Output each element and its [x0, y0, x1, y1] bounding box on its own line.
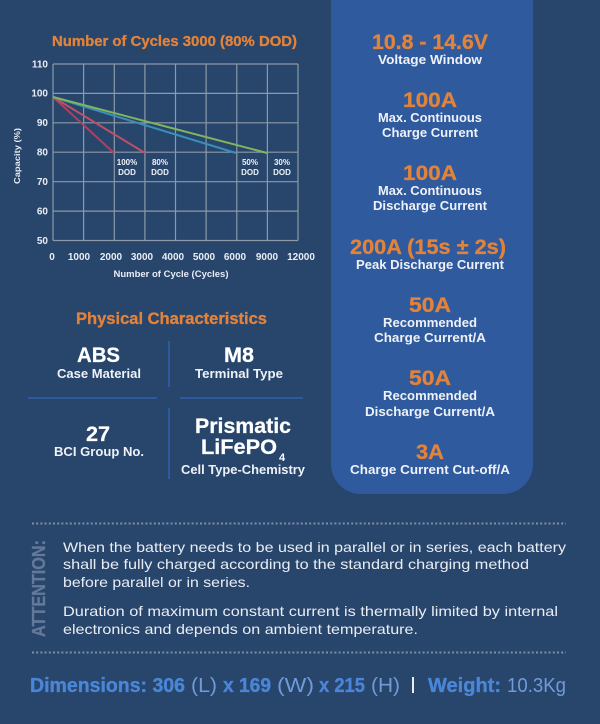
label: 80% DOD: DOD: [151, 168, 169, 177]
label: 100% DOD: [117, 158, 137, 177]
attention note text: before parallel or in series.: [63, 574, 250, 590]
spec: voltage window: 10.8 - 14.6V: [372, 31, 488, 54]
item: cell type chemistry: 4: [279, 452, 286, 464]
item: terminal type: [195, 344, 283, 381]
attention note text: When the battery needs to be used in parallel or in series, each battery: [63, 539, 566, 555]
spec: recommended charge current: Recommended: [383, 316, 477, 330]
item: case material: Case Material: [57, 367, 141, 381]
spec: max continuous discharge current: 100A: [403, 162, 457, 185]
attention note text: [63, 539, 566, 637]
x axis tick labels: 9000: [256, 252, 279, 263]
line chart: capacity vs cycles: [12, 60, 315, 279]
spec: max continuous charge current: Charge Current: [382, 126, 479, 140]
item: case material: ABS: [77, 344, 120, 367]
item: BCI group number: BCI Group No.: [54, 445, 144, 459]
x axis tick labels: 6000: [224, 252, 247, 263]
series: 100% DOD: [53, 97, 114, 153]
spec: max continuous charge current: [378, 89, 482, 140]
spec: max continuous charge current: 100A: [403, 89, 457, 112]
panel: electrical specifications: [331, 0, 533, 494]
item: cell type chemistry: [181, 415, 305, 477]
x axis tick labels: 4000: [162, 252, 185, 263]
y axis tick labels: 100: [31, 88, 48, 100]
y axis tick labels: 110: [32, 60, 48, 70]
y axis tick labels: 80: [37, 148, 48, 158]
label: 50% DOD: [241, 158, 259, 177]
spec: max continuous discharge current: Max. Continuous: [378, 184, 482, 198]
item: BCI group number: [54, 423, 144, 459]
label: 50% DOD: DOD: [241, 168, 259, 177]
panel: physical characteristics grid: [28, 341, 305, 479]
x axis title: Number of Cycle (Cycles): [114, 269, 228, 279]
spec: voltage window: [372, 31, 488, 67]
heading: physical characteristics: Physical Characteristics: [76, 310, 267, 328]
spec: recommended charge current: Charge Current/A: [374, 331, 486, 345]
label: 30% DOD: [273, 158, 291, 177]
y axis tick labels: 70: [37, 177, 48, 188]
x axis tick labels: 0: [49, 252, 55, 263]
series: 50% DOD: [53, 97, 236, 153]
dimensions and weight line: 10.3Kg: [507, 675, 566, 697]
attention note text: electronics and depends on ambient temperature.: [63, 621, 418, 637]
dimensions and weight line: [30, 675, 566, 697]
item: terminal type: Terminal Type: [195, 367, 283, 381]
attention label: ATTENTION:: [29, 540, 49, 637]
label: 80% DOD: [151, 158, 169, 177]
y axis tick labels: 60: [37, 206, 48, 218]
x axis tick labels: 2000: [100, 252, 123, 263]
spec: recommended discharge current: Discharge Current/A: [365, 405, 495, 419]
label: 80% DOD: 80%: [152, 158, 168, 167]
dimensions and weight line: (H): [371, 675, 400, 697]
y axis tick labels: [31, 60, 48, 247]
y axis tick labels: 50: [37, 236, 48, 247]
spec: recommended discharge current: Recommended: [383, 389, 477, 403]
item: BCI group number: 27: [86, 423, 110, 446]
x axis tick labels: 12000: [287, 252, 315, 263]
spec: peak discharge current: 200A (15s ± 2s): [350, 236, 506, 259]
spec: charge current cut-off: [350, 441, 510, 477]
series: 80% DOD: [53, 97, 145, 153]
item: case material: [57, 344, 141, 381]
dimensions and weight line: Weight:: [428, 675, 501, 697]
x axis tick labels: 3000: [131, 252, 154, 263]
y axis tick labels: 90: [37, 118, 48, 129]
spec: charge current cut-off: 3A: [416, 441, 444, 464]
dimensions and weight line: (W): [277, 675, 314, 697]
item: cell type chemistry: Prismatic: [195, 415, 291, 438]
label: 30% DOD: DOD: [273, 168, 291, 177]
dimensions and weight line: (L): [191, 675, 217, 697]
spec: recommended discharge current: [365, 367, 495, 419]
attention note text: Duration of maximum constant current is thermally limited by internal: [63, 603, 558, 619]
x axis tick labels: 5000: [193, 252, 216, 263]
item: cell type chemistry: LiFePO: [201, 436, 277, 459]
spec: voltage window: Voltage Window: [378, 53, 482, 67]
item: terminal type: M8: [224, 344, 254, 367]
dimensions and weight line: x 169: [223, 675, 271, 697]
spec: peak discharge current: Peak Discharge Current: [356, 258, 505, 272]
spec: peak discharge current: [350, 236, 506, 272]
label: 100% DOD: 100%: [117, 158, 137, 167]
dimensions and weight line: x 215: [319, 675, 365, 697]
label: 50% DOD: 50%: [242, 158, 258, 167]
spec: charge current cut-off: Charge Current Cut-off/A: [350, 463, 510, 477]
x axis tick labels: 1000: [68, 252, 91, 263]
spec: recommended discharge current: 50A: [409, 367, 451, 390]
label: 100% DOD: DOD: [118, 168, 136, 177]
spec: recommended charge current: [374, 294, 486, 345]
attention note text: shall be fully charged according to the standard charging method: [63, 556, 529, 572]
spec: max continuous discharge current: Discharge Current: [373, 199, 488, 213]
spec: max continuous charge current: Max. Continuous: [378, 111, 482, 125]
spec: max continuous discharge current: [373, 162, 488, 213]
x axis tick labels: [49, 252, 315, 263]
y axis title: Capacity (%): [12, 128, 22, 184]
series: 30% DOD: [53, 97, 267, 153]
label: 30% DOD: 30%: [274, 158, 290, 167]
dimensions and weight line: Dimensions: 306: [30, 675, 185, 697]
item: cell type chemistry: Cell Type-Chemistry: [181, 463, 305, 477]
chart title: Number of Cycles 3000 (80% DOD): [52, 34, 297, 50]
spec: recommended charge current: 50A: [409, 294, 451, 317]
